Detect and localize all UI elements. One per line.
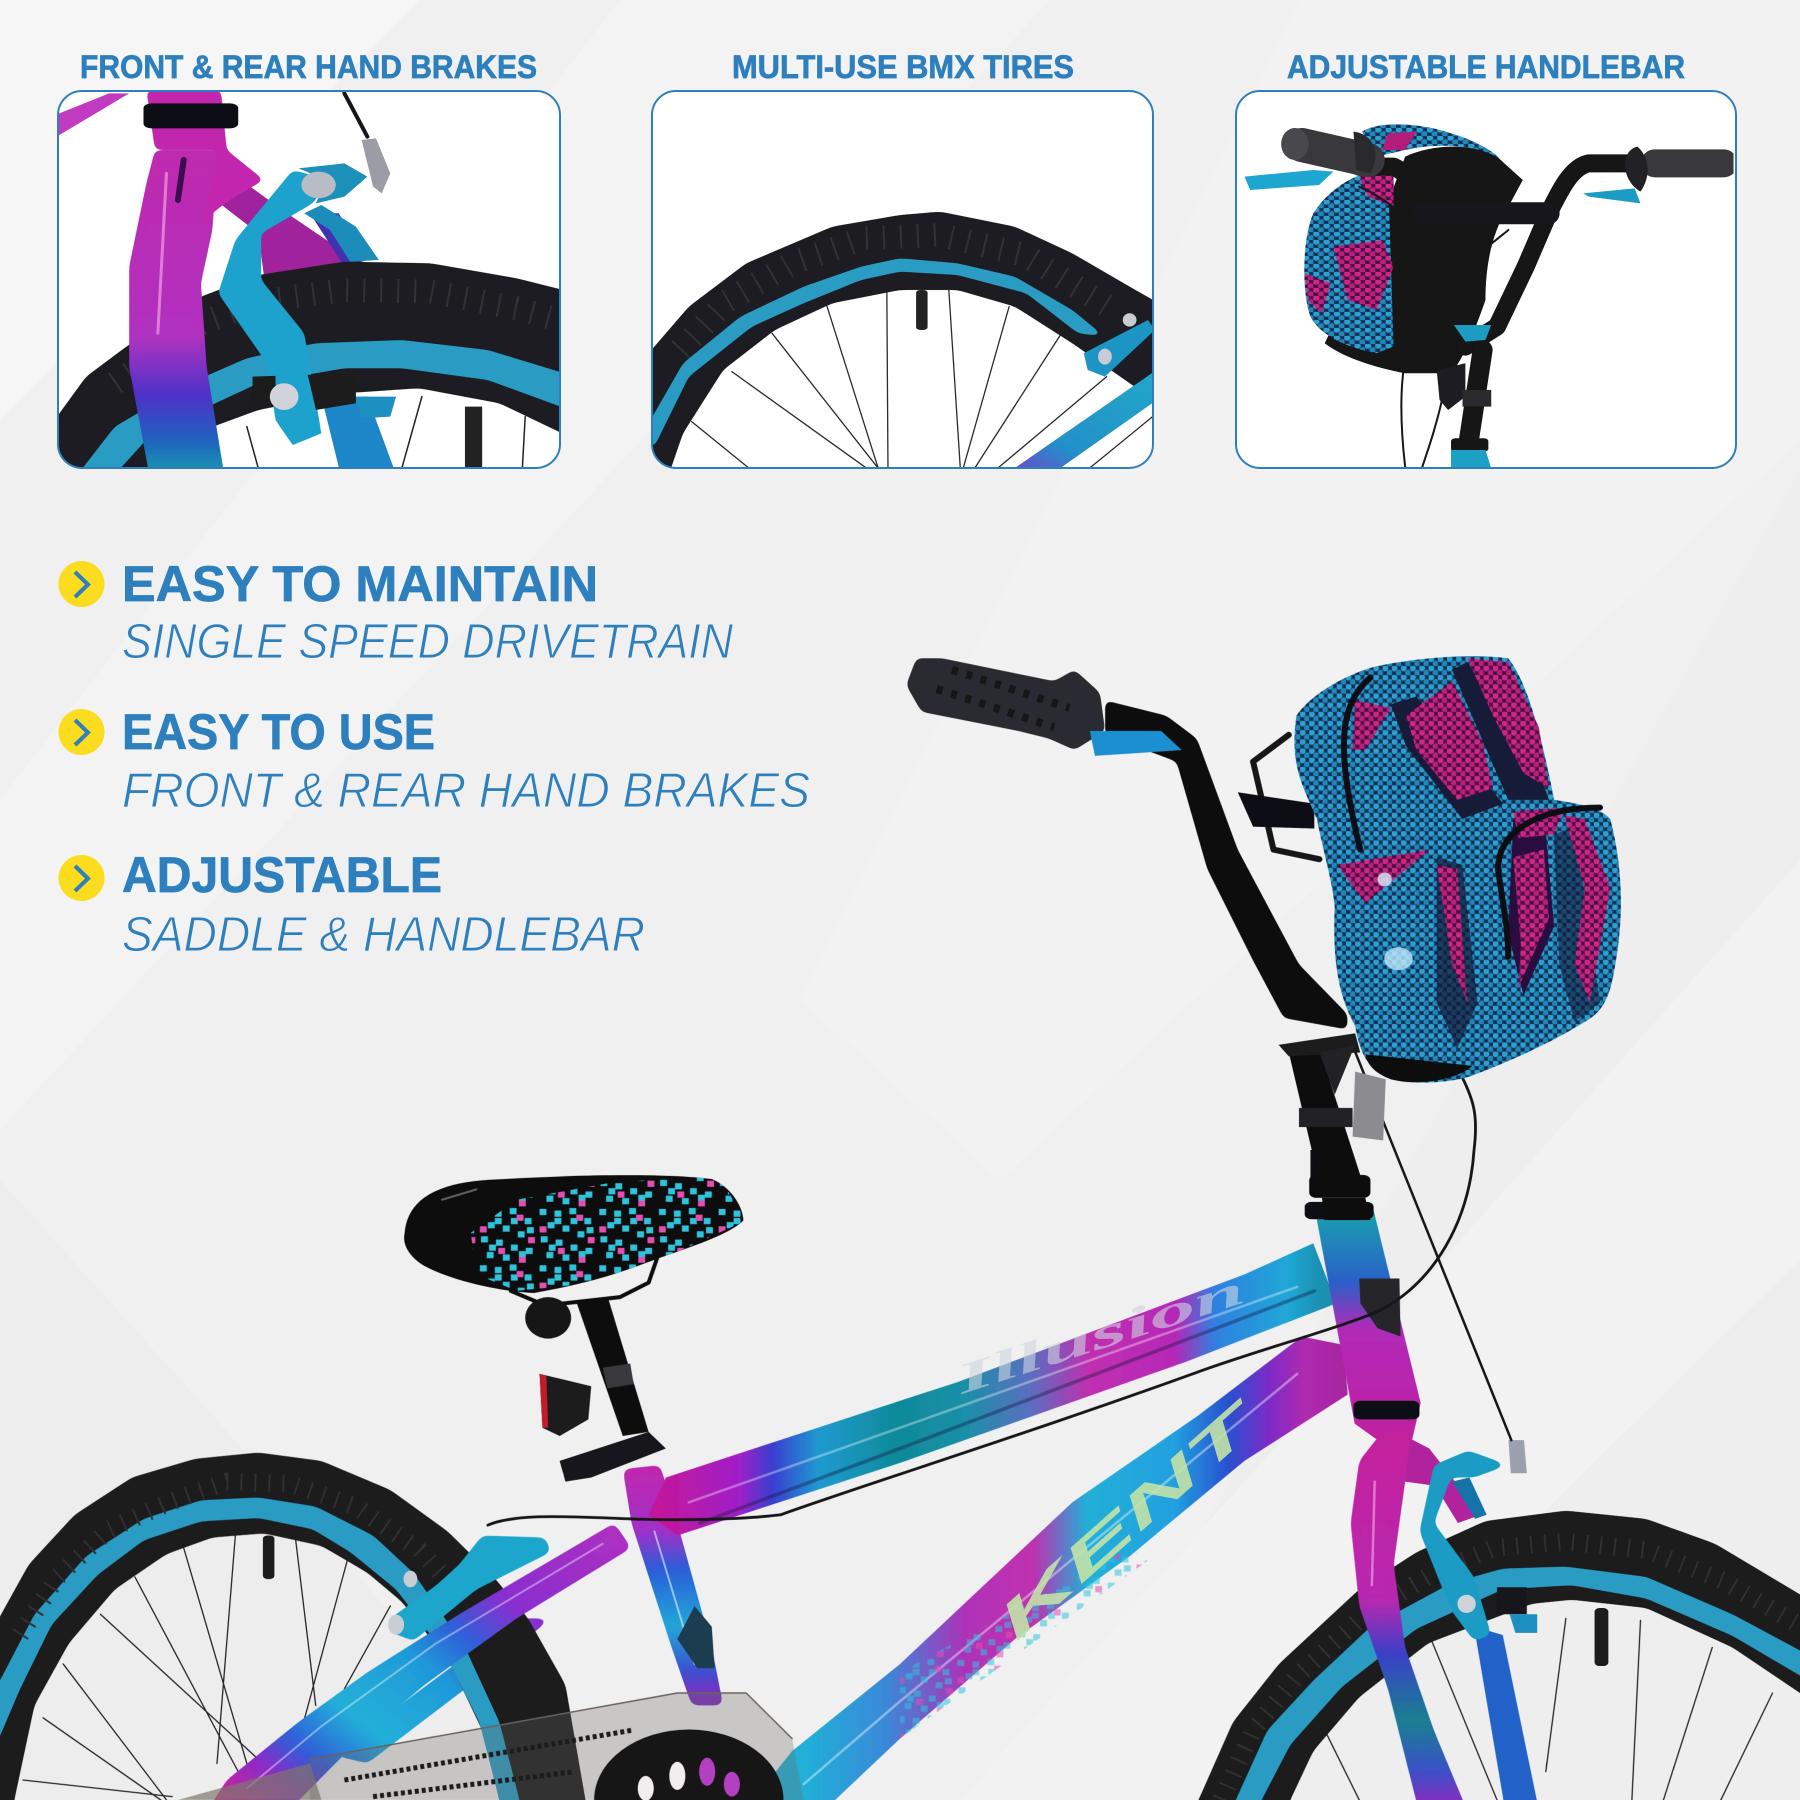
head tube emblem (1359, 1278, 1401, 1337)
panel: BMX tire close-up (651, 90, 1154, 469)
icon: yellow chevron bullet (58, 561, 104, 607)
reflector (1353, 1072, 1386, 1140)
panel: adjustable handlebar close-up (1236, 91, 1736, 468)
handlebar and backpack (906, 656, 1621, 1220)
handlebar tube (1105, 700, 1347, 1029)
saddle (404, 1175, 746, 1305)
headset collars (1305, 1150, 1420, 1419)
frame badge (677, 1606, 715, 1668)
feature detail: FRONT & REAR HAND BRAKES (122, 764, 810, 818)
chain guard (178, 1693, 804, 1800)
head tube (1316, 1210, 1421, 1440)
down tube sequin decal (900, 1548, 1148, 1739)
front wheel spokes (1325, 1618, 1773, 1800)
top tube (649, 1243, 1336, 1535)
front wheel tire (1177, 1511, 1800, 1800)
backpack (1294, 656, 1621, 1083)
top tube logo: Illusion (949, 1267, 1250, 1404)
seat stay (195, 1523, 631, 1800)
seat tube (623, 1465, 723, 1705)
seat post and clamp (525, 1297, 666, 1482)
front valve (1595, 1608, 1608, 1666)
rear reflector (540, 1374, 591, 1436)
crossbar (1238, 792, 1314, 829)
rear wheel blue sidewall (0, 1497, 525, 1800)
front brake (1420, 1440, 1537, 1641)
front fork near leg (1351, 1432, 1481, 1800)
feature heading: EASY TO MAINTAIN (122, 556, 598, 612)
heading: multi-use BMX tires: MULTI-USE BMX TIRES (732, 49, 1074, 85)
far chain stay (333, 1618, 551, 1763)
brake lever (1090, 731, 1182, 756)
front wheel blue sidewall (1220, 1567, 1800, 1800)
feature list: adjustable (58, 847, 645, 962)
brake cables (488, 1067, 1476, 1525)
icon: yellow chevron bullet (58, 709, 104, 755)
heading: adjustable handlebar: ADJUSTABLE HANDLEBAR (1287, 49, 1685, 85)
feature detail: SINGLE SPEED DRIVETRAIN (122, 615, 734, 669)
feature heading: ADJUSTABLE (122, 847, 442, 903)
grip (906, 658, 1105, 750)
rear brake (387, 1535, 551, 1641)
chain (344, 1730, 631, 1797)
handlebar straps (1253, 735, 1319, 859)
stem and steerer (1279, 1033, 1370, 1220)
main bike illustration: frame and wheels (0, 1051, 1800, 1800)
rear wheel spokes (23, 1535, 390, 1800)
down tube (729, 1337, 1348, 1800)
front fork far leg (1474, 1627, 1543, 1800)
icon: yellow chevron bullet (58, 855, 104, 901)
down tube logo: KENT (986, 1388, 1272, 1650)
rear valve (263, 1535, 274, 1579)
rear wheel tire (0, 1453, 591, 1800)
heading: front and rear hand brakes: FRONT & REAR HAND BRAKES (80, 49, 537, 85)
feature list: easy to maintain (58, 556, 734, 669)
chainring (594, 1729, 784, 1800)
feature list: easy to use (58, 704, 810, 818)
feature heading: EASY TO USE (122, 704, 435, 760)
feature detail: SADDLE & HANDLEBAR (122, 908, 645, 962)
panel: front brake close-up (57, 90, 561, 469)
